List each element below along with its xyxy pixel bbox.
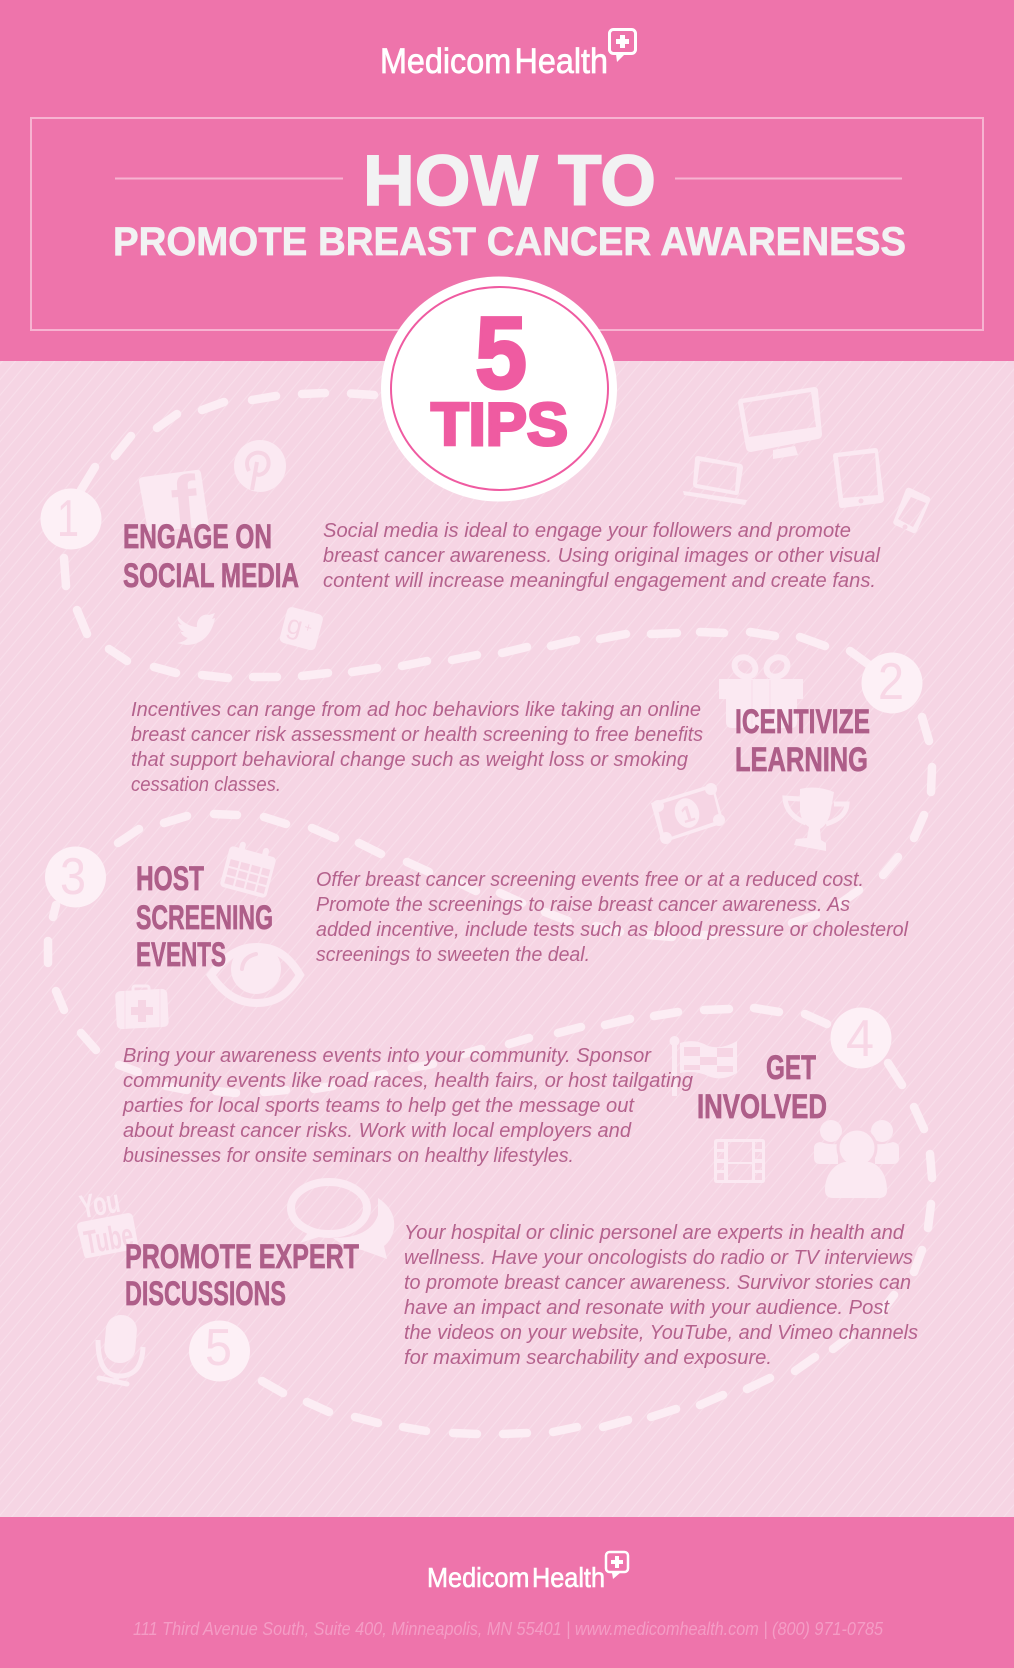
body text 4: parties for local sports teams to help get the message out: [122, 1094, 635, 1117]
heading 3: EVENTS: [136, 936, 226, 974]
number badge 2: [862, 652, 922, 714]
number badge 3: [45, 846, 106, 908]
body text 1: Social media is ideal to engage your followers and promote: [323, 519, 851, 542]
number badge 5: [189, 1319, 250, 1382]
contact line: 111 Third Avenue South, Suite 400, Minneapolis, MN 55401 | www.medicomhealth.com | (800) 971-0785: [133, 1619, 884, 1639]
background icons: rewards: 1: [678, 799, 698, 828]
tip 3: host screening events: [45, 846, 909, 974]
body text 3: [316, 868, 909, 966]
body text 4: community events like road races, health fairs, or host tailgating: [123, 1069, 694, 1092]
heading 5: PROMOTE EXPERT: [125, 1238, 359, 1276]
badge: 5 tips: 5: [475, 296, 527, 410]
body text 3: Offer breast cancer screening events free or at a reduced cost.: [316, 868, 864, 891]
footer band: [0, 1517, 1014, 1668]
background icons: social media: f: [167, 458, 202, 548]
body text 4: businesses for onsite seminars on healthy lifestyles.: [123, 1144, 574, 1167]
body text 2: that support behavioral change such as weight loss or smoking: [131, 748, 689, 771]
body text 5: [404, 1221, 918, 1369]
tip 5: promote expert discussions: [125, 1221, 918, 1382]
heading 3: [136, 860, 273, 974]
heading 4: INVOLVED: [697, 1088, 827, 1126]
number badge 4: 4: [846, 1010, 874, 1068]
heading 2: LEARNING: [735, 741, 868, 779]
background icons: media: Tube: [81, 1216, 136, 1261]
heading 1: SOCIAL MEDIA: [123, 557, 299, 595]
body text 5: have an impact and resonate with your audience. Post: [404, 1296, 890, 1319]
body text 5: the videos on your website, YouTube, and Vimeo channels: [404, 1321, 918, 1344]
body text 3: screenings to sweeten the deal.: [316, 943, 590, 966]
tip 1: engage on social media: [40, 488, 881, 595]
background icons: community: [670, 1036, 899, 1198]
title: how to: HOW TO: [363, 142, 656, 221]
logo: Medicom Health: Medicom Health: [380, 42, 608, 81]
body text 3: Promote the screenings to raise breast cancer awareness. As: [316, 893, 850, 916]
body text 5: wellness. Have your oncologists do radio or TV interviews: [404, 1246, 913, 1269]
tip 4: get involved: [122, 1008, 891, 1167]
background icons: social media: [139, 440, 324, 651]
background icons: media: You: [77, 1182, 123, 1225]
background icons: devices: [683, 387, 930, 533]
subtitle: PROMOTE BREAST CANCER AWARENESS: [113, 220, 906, 264]
number badge 2: 2: [878, 653, 904, 711]
heading 5: DISCUSSIONS: [125, 1275, 286, 1313]
heading 2: [735, 703, 870, 779]
body text 4: Bring your awareness events into your community. Sponsor: [123, 1044, 652, 1067]
number badge 1: [40, 488, 102, 550]
body text 2: Incentives can range from ad hoc behaviors like taking an online: [131, 698, 701, 721]
body text 5: for maximum searchability and exposure.: [404, 1346, 772, 1369]
body text 1: [323, 519, 881, 592]
badge: 5 tips: TIPS: [431, 391, 568, 458]
body text 4: [122, 1044, 694, 1167]
body text 1: breast cancer awareness. Using original images or other visual: [323, 544, 881, 567]
footer logo: Medicom Health: [427, 1562, 605, 1593]
number badge 5: 5: [205, 1319, 232, 1377]
body text 2: [131, 698, 703, 796]
background icons: social media: +: [303, 619, 314, 636]
body text 1: content will increase meaningful engagement and create fans.: [323, 569, 876, 592]
background icons: social media: g: [284, 609, 306, 642]
number badge 3: 3: [60, 848, 86, 906]
title frame: [31, 118, 983, 330]
badge: 5 tips: [381, 276, 617, 502]
background icons: rewards: [651, 653, 847, 851]
heading 1: ENGAGE ON: [123, 518, 272, 556]
background icons: screening: [115, 839, 300, 1029]
heading 3: SCREENING: [136, 899, 273, 937]
dashed route connecting the tips: [48, 393, 932, 1434]
body text 5: Your hospital or clinic personel are experts in health and: [404, 1221, 905, 1244]
header band: [0, 0, 1014, 361]
body text 4: about breast cancer risks. Work with local employers and: [123, 1119, 632, 1142]
body text 5: to promote breast cancer awareness. Survivor stories can: [404, 1271, 911, 1294]
body text 2: cessation classes.: [131, 773, 281, 796]
heading 3: HOST: [136, 860, 204, 898]
number badge 4: [830, 1008, 892, 1068]
body text 3: added incentive, include tests such as blood pressure or cholesterol: [316, 918, 909, 941]
heading 5: [125, 1238, 359, 1313]
number badge 1: 1: [57, 490, 79, 548]
heading 2: ICENTIVIZE: [735, 703, 870, 741]
background icons: media: [77, 1182, 394, 1384]
heading 1: [123, 518, 299, 595]
heading 4: [697, 1049, 827, 1126]
heading 4: GET: [766, 1049, 816, 1087]
tip 2: incentivize learning: [131, 652, 922, 796]
body text 2: breast cancer risk assessment or health screening to free benefits: [131, 723, 703, 746]
